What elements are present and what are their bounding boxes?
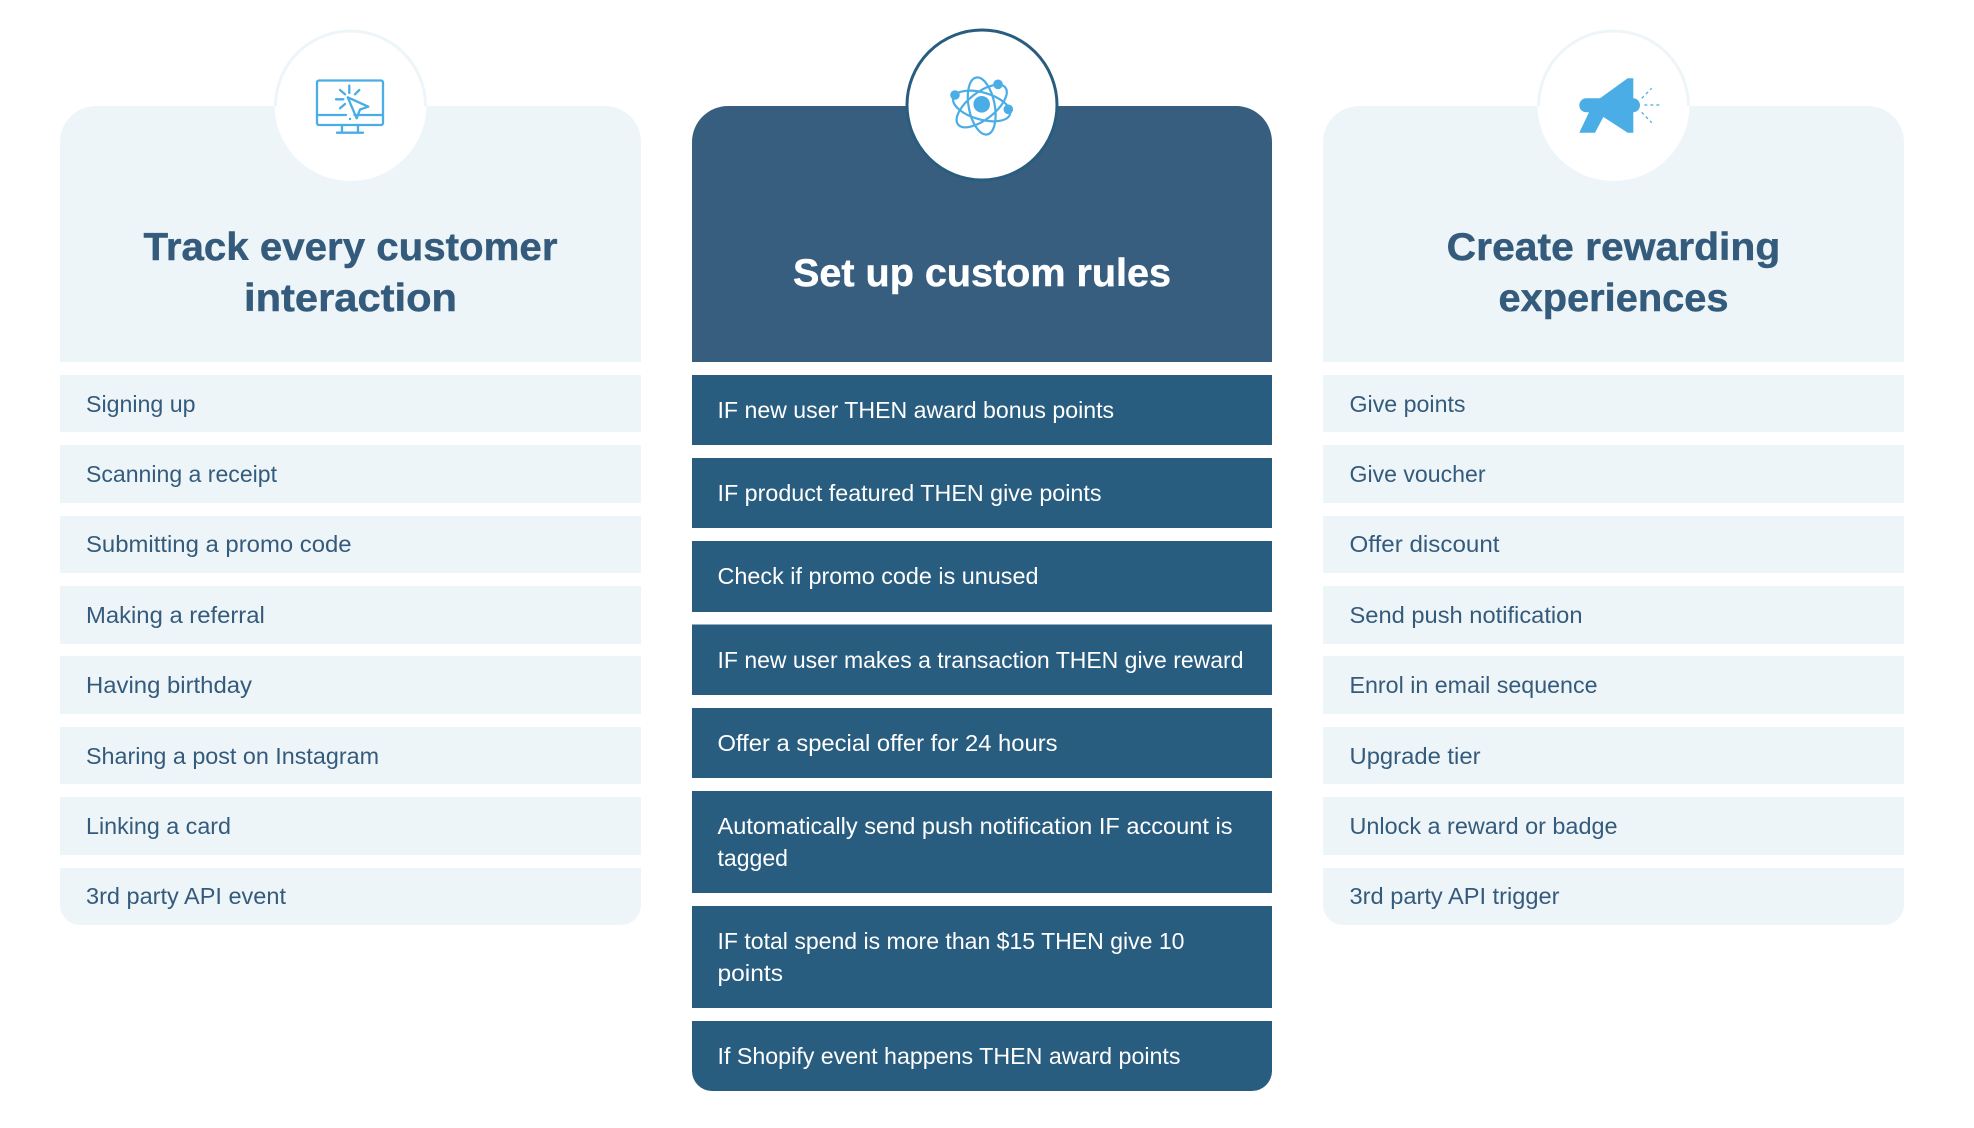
item: offer discount: Offer discount	[1350, 531, 1500, 557]
item: send push notification	[1323, 586, 1904, 644]
header card: track	[60, 106, 641, 362]
item: special offer: Offer a special offer for 24 hours	[718, 730, 1058, 756]
list: rules	[692, 375, 1272, 1091]
heading: set up custom rules: Set up custom rules	[793, 252, 1171, 295]
item: new user bonus	[692, 375, 1272, 445]
item: 3rd party api trigger	[1323, 868, 1904, 925]
item: 3rd party api event	[60, 868, 641, 925]
item: special offer	[692, 708, 1272, 778]
item: push notification if tagged	[692, 791, 1272, 893]
heading: create rewarding experiences: experiences	[1498, 277, 1728, 320]
item: making a referral	[60, 586, 641, 644]
heading: create rewarding experiences	[1447, 226, 1780, 320]
item: linking a card	[60, 797, 641, 855]
list: customer interactions	[60, 375, 641, 925]
item: shopify event	[692, 1021, 1272, 1091]
heading: track every customer interaction: interaction	[244, 277, 457, 320]
item: submitting a promo code: Submitting a promo code	[86, 531, 352, 557]
item: offer discount	[1323, 516, 1904, 573]
item: upgrade tier: Upgrade tier	[1350, 743, 1481, 769]
item: submitting a promo code	[60, 516, 641, 573]
item: signing up	[60, 375, 641, 432]
item: send push notification: Send push notification	[1350, 602, 1582, 628]
panel: set up custom rules	[692, 30, 1272, 1091]
item: total spend	[692, 906, 1272, 1008]
item: scanning a receipt	[60, 445, 641, 503]
item: 3rd party api event: 3rd party API event	[86, 883, 286, 909]
item: promo code unused	[692, 541, 1272, 612]
icon badge: megaphone	[1538, 29, 1690, 181]
item: scanning a receipt: Scanning a receipt	[86, 461, 277, 487]
item: making a referral: Making a referral	[86, 602, 265, 628]
item: enrol in email sequence: Enrol in email sequence	[1350, 672, 1598, 698]
item: linking a card: Linking a card	[86, 813, 231, 839]
item: having birthday	[60, 656, 641, 714]
item: total spend: points	[718, 960, 783, 986]
panel: track every customer interaction	[60, 29, 641, 925]
item: signing up: Signing up	[86, 391, 196, 417]
item: new user bonus: IF new user THEN award bonus points	[718, 397, 1114, 423]
panel: create rewarding experiences	[1323, 29, 1904, 925]
item: enrol in email sequence	[1323, 656, 1904, 714]
item: give voucher: Give voucher	[1350, 461, 1486, 487]
item: new user transaction	[692, 624, 1272, 695]
item: upgrade tier	[1323, 727, 1904, 784]
item: having birthday: Having birthday	[86, 672, 252, 698]
item: sharing a post on instagram	[60, 727, 641, 784]
item: sharing a post on instagram: Sharing a post on Instagram	[86, 743, 379, 769]
header card: rules	[692, 106, 1272, 362]
item: give points	[1323, 375, 1904, 432]
icon badge: monitor with cursor	[274, 29, 426, 181]
item: push notification if tagged: Automatically send push notification IF account is	[718, 813, 1232, 839]
heading: track every customer interaction: Track every customer	[144, 226, 558, 269]
item: new user transaction: IF new user makes a transaction THEN give reward	[718, 647, 1244, 673]
item: unlock a reward or badge: Unlock a reward or badge	[1350, 813, 1618, 839]
item: total spend: IF total spend is more than $15 THEN give 10	[718, 928, 1184, 954]
heading: create rewarding experiences: Create rewarding	[1447, 226, 1780, 269]
item: give points: Give points	[1350, 391, 1466, 417]
item: push notification if tagged: tagged	[718, 845, 788, 871]
heading: track every customer interaction	[144, 226, 558, 320]
item: promo code unused: Check if promo code is unused	[718, 563, 1038, 589]
icon badge: atom	[907, 30, 1057, 180]
item: give voucher	[1323, 445, 1904, 503]
item: product featured: IF product featured THEN give points	[718, 480, 1102, 506]
header card: rewards	[1323, 106, 1904, 362]
item: 3rd party api trigger: 3rd party API trigger	[1350, 883, 1560, 909]
item: shopify event: If Shopify event happens THEN award points	[718, 1043, 1180, 1069]
item: product featured	[692, 458, 1272, 528]
list: rewards	[1323, 375, 1904, 925]
item: unlock a reward or badge	[1323, 797, 1904, 855]
